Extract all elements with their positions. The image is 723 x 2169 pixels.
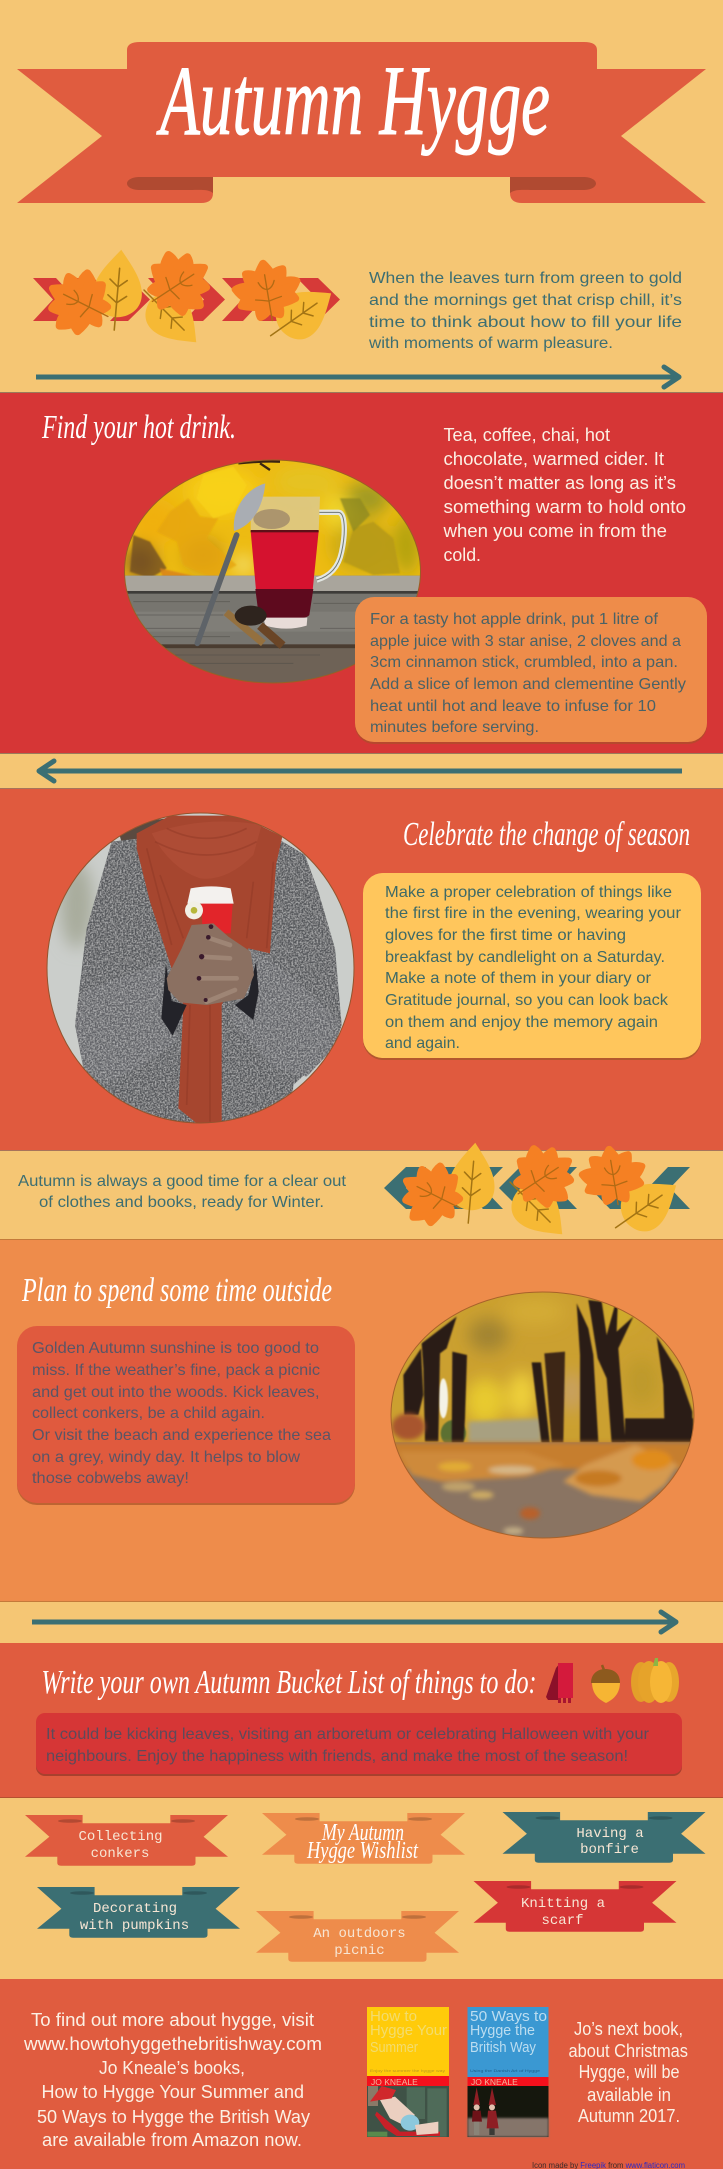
photo: woman in scarf holding cup xyxy=(40,805,360,1130)
callout: proper celebration: and again. xyxy=(385,1035,460,1052)
icon: pumpkin xyxy=(631,1658,679,1703)
callout: proper celebration: Make a note of them in your diary or xyxy=(385,970,652,987)
callout: golden sunshine: collect conkers, be a child again. xyxy=(32,1405,265,1422)
coat xyxy=(75,838,342,1125)
strip: clear out text xyxy=(18,1173,347,1211)
cinnamon and star anise xyxy=(226,606,283,646)
body text: hot drinks: something warm to hold onto xyxy=(444,497,686,517)
body text: hot drinks xyxy=(442,425,686,565)
footer text: next book: Jo’s next book, xyxy=(574,2019,683,2039)
callout: proper celebration: gloves for the first time or having xyxy=(385,927,626,944)
ribbon: decorating with pumpkins xyxy=(37,1887,240,1938)
ribbon: knitting a scarf: scarf xyxy=(541,1913,584,1929)
intro text: with moments of warm pleasure. xyxy=(368,335,613,352)
callout: bucket list ideas xyxy=(36,1713,682,1776)
book: how to hygge your summer: Summer xyxy=(370,2039,418,2056)
panel: find your hot drink xyxy=(0,392,723,754)
intro text: time to think about how to fill your life xyxy=(369,314,682,331)
spoon xyxy=(197,535,237,643)
book: how to hygge your summer: Enjoy the summer the hygge way xyxy=(370,2068,445,2073)
ribbon: my autumn hygge wishlist: Hygge Wishlist xyxy=(306,1838,419,1864)
ribbon: having a bonfire: bonfire xyxy=(580,1842,639,1858)
callout: golden sunshine: miss. If the weather’s fine, pack a picnic xyxy=(32,1362,320,1379)
strip: clear out text: Autumn is always a good time for a clear out xyxy=(18,1173,347,1190)
ribbon: my autumn hygge wishlist: My Autumn xyxy=(321,1820,404,1846)
book: how to hygge your summer: JO KNEALE xyxy=(371,2077,418,2087)
ribbon: collecting conkers xyxy=(25,1815,228,1866)
callout: hot apple drink recipe: minutes before serving. xyxy=(370,719,539,736)
body text: hot drinks: cold. xyxy=(444,545,481,565)
callout: bucket list ideas: It could be kicking leaves, visiting an arboretum or celebrating Halloween with your xyxy=(46,1726,650,1743)
callout: proper celebration: Gratitude journal, so you can look back xyxy=(385,992,669,1009)
callout: proper celebration: on them and enjoy the memory again xyxy=(385,1014,658,1031)
sleeves xyxy=(75,962,180,1085)
book: 50 ways to hygge the british way: 50 Ways to xyxy=(470,2008,547,2025)
callout: golden sunshine: those cobwebs away! xyxy=(32,1470,189,1487)
strip: clear out text: of clothes and books, ready for Winter. xyxy=(39,1194,324,1211)
body text: hot drinks: Tea, coffee, chai, hot xyxy=(444,425,610,445)
panel: celebrate the change of season xyxy=(0,788,723,1151)
ribbon: decorating with pumpkins: with pumpkins xyxy=(80,1918,189,1934)
book: 50 ways to hygge the british way: British Way xyxy=(470,2039,536,2056)
leaves and teal chevrons decoration xyxy=(384,1137,690,1250)
footer text: find out more: To find out more about hygge, visit xyxy=(31,2010,314,2030)
arrow: left xyxy=(39,761,682,781)
body text: hot drinks: doesn’t matter as long as it’s xyxy=(444,473,676,493)
book: 50 ways to hygge the british way: Hygge the xyxy=(470,2022,535,2039)
intro text: and the mornings get that crisp chill, it’s xyxy=(369,292,682,309)
tree trunks xyxy=(403,1300,693,1446)
panel: plan to spend time outside xyxy=(0,1239,723,1602)
ribbon: collecting conkers: conkers xyxy=(91,1846,149,1862)
ribbon: having a bonfire: Having a xyxy=(576,1826,644,1842)
callout: golden sunshine: Golden Autumn sunshine is too good to xyxy=(32,1340,319,1357)
heading: bucket list: Write your own Autumn Bucket List of things to do: xyxy=(42,1664,536,1701)
intro text xyxy=(368,270,682,352)
footer text: find out more: Jo Kneale’s books, xyxy=(99,2058,245,2078)
ribbon: an outdoors picnic: picnic xyxy=(334,1943,385,1959)
callout: golden sunshine: on a grey, windy day. It helps to blow xyxy=(32,1449,300,1466)
callout: hot apple drink recipe: 3cm cinnamon stick, crumbled, into a pan. xyxy=(370,654,678,671)
ribbon: my autumn hygge wishlist xyxy=(262,1813,465,1864)
panel: autumn bucket list xyxy=(0,1643,723,1798)
heading: find your hot drink: Find your hot drink. xyxy=(41,409,236,446)
callout: proper celebration: the first fire in the evening, wearing your xyxy=(385,905,682,922)
footer text: find out more: 50 Ways to Hygge the British Way xyxy=(37,2107,310,2127)
ribbon: knitting a scarf: Knitting a xyxy=(521,1896,605,1912)
arrow: right xyxy=(36,367,679,387)
daisy xyxy=(185,904,203,920)
cuffs xyxy=(161,964,187,1036)
book: how to hygge your summer: How to xyxy=(370,2008,417,2025)
ribbon: decorating with pumpkins: Decorating xyxy=(93,1901,177,1917)
book: 50 ways to hygge the british way: JO KNEALE xyxy=(471,2077,518,2087)
intro text: When the leaves turn from green to gold xyxy=(369,270,682,287)
footer text: next book xyxy=(568,2019,688,2126)
footer text: next book: Autumn 2017. xyxy=(578,2106,680,2126)
book: 50 ways to hygge the british way xyxy=(468,2007,548,2137)
footer text: find out more: are available from Amazon now. xyxy=(42,2130,302,2150)
callout: hot apple drink recipe xyxy=(355,597,707,744)
callout: hot apple drink recipe: heat until hot and leave to infuse for 10 xyxy=(370,698,656,715)
footer text: next book: Hygge, will be xyxy=(579,2062,680,2082)
callout: golden sunshine xyxy=(17,1326,355,1505)
callout: bucket list ideas: neighbours. Enjoy the happiness with friends, and make the most of the season! xyxy=(46,1748,628,1765)
leaf covered ground xyxy=(396,1442,690,1538)
footer text: next book: available in xyxy=(587,2085,671,2105)
hands xyxy=(167,923,254,1005)
book: how to hygge your summer: Hygge Your xyxy=(370,2022,447,2039)
ribbon: collecting conkers: Collecting xyxy=(78,1829,163,1845)
callout: golden sunshine: and get out into the woods. Kick leaves, xyxy=(32,1384,320,1401)
glass of red drink xyxy=(251,497,344,629)
callout: golden sunshine: Or visit the beach and experience the sea xyxy=(32,1427,331,1444)
leaves and red chevrons decoration xyxy=(33,242,344,358)
autumn leaves xyxy=(130,467,400,580)
icon: scarf xyxy=(546,1663,573,1703)
ribbon: having a bonfire xyxy=(502,1812,706,1863)
footer text: find out more: How to Hygge Your Summer and xyxy=(42,2082,304,2102)
body text: hot drinks: when you come in from the xyxy=(442,521,667,541)
callout: hot apple drink recipe: For a tasty hot apple drink, put 1 litre of xyxy=(370,611,659,628)
photo: hot drink in glass xyxy=(120,455,425,692)
photo: tree-lined autumn path xyxy=(390,1292,694,1538)
ribbon: an outdoors picnic: An outdoors xyxy=(313,1926,406,1942)
heading: plan to spend time: Plan to spend some time outside xyxy=(21,1272,332,1309)
body text: hot drinks: chocolate, warmed cider. It xyxy=(444,449,664,469)
book: 50 ways to hygge the british way: Using the Danish Art of Hygge xyxy=(470,2068,541,2073)
callout: hot apple drink recipe: Add a slice of lemon and clementine Gently xyxy=(370,676,686,693)
title banner xyxy=(17,42,706,203)
footer text: next book: about Christmas xyxy=(568,2041,688,2061)
book: how to hygge your summer xyxy=(367,2007,449,2137)
scarf xyxy=(137,816,282,1123)
ribbon: knitting a scarf xyxy=(474,1881,676,1932)
wooden table xyxy=(120,576,425,691)
panel: footer xyxy=(0,1979,723,2169)
footer text: find out more xyxy=(23,2010,322,2150)
callout: hot apple drink recipe: apple juice with 3 star anise, 2 cloves and a xyxy=(370,633,681,650)
callout: proper celebration xyxy=(363,873,701,1060)
callout: proper celebration: Make a proper celebration of things like xyxy=(385,884,672,901)
icon: acorn xyxy=(591,1665,620,1703)
arrow: right xyxy=(32,1612,676,1632)
callout: proper celebration: breakfast by candlelight on a Saturday. xyxy=(385,949,665,966)
cup xyxy=(201,903,233,933)
footer text: find out more: www.howtohyggethebritishway.com xyxy=(23,2034,322,2054)
ribbon: an outdoors picnic xyxy=(256,1911,459,1962)
